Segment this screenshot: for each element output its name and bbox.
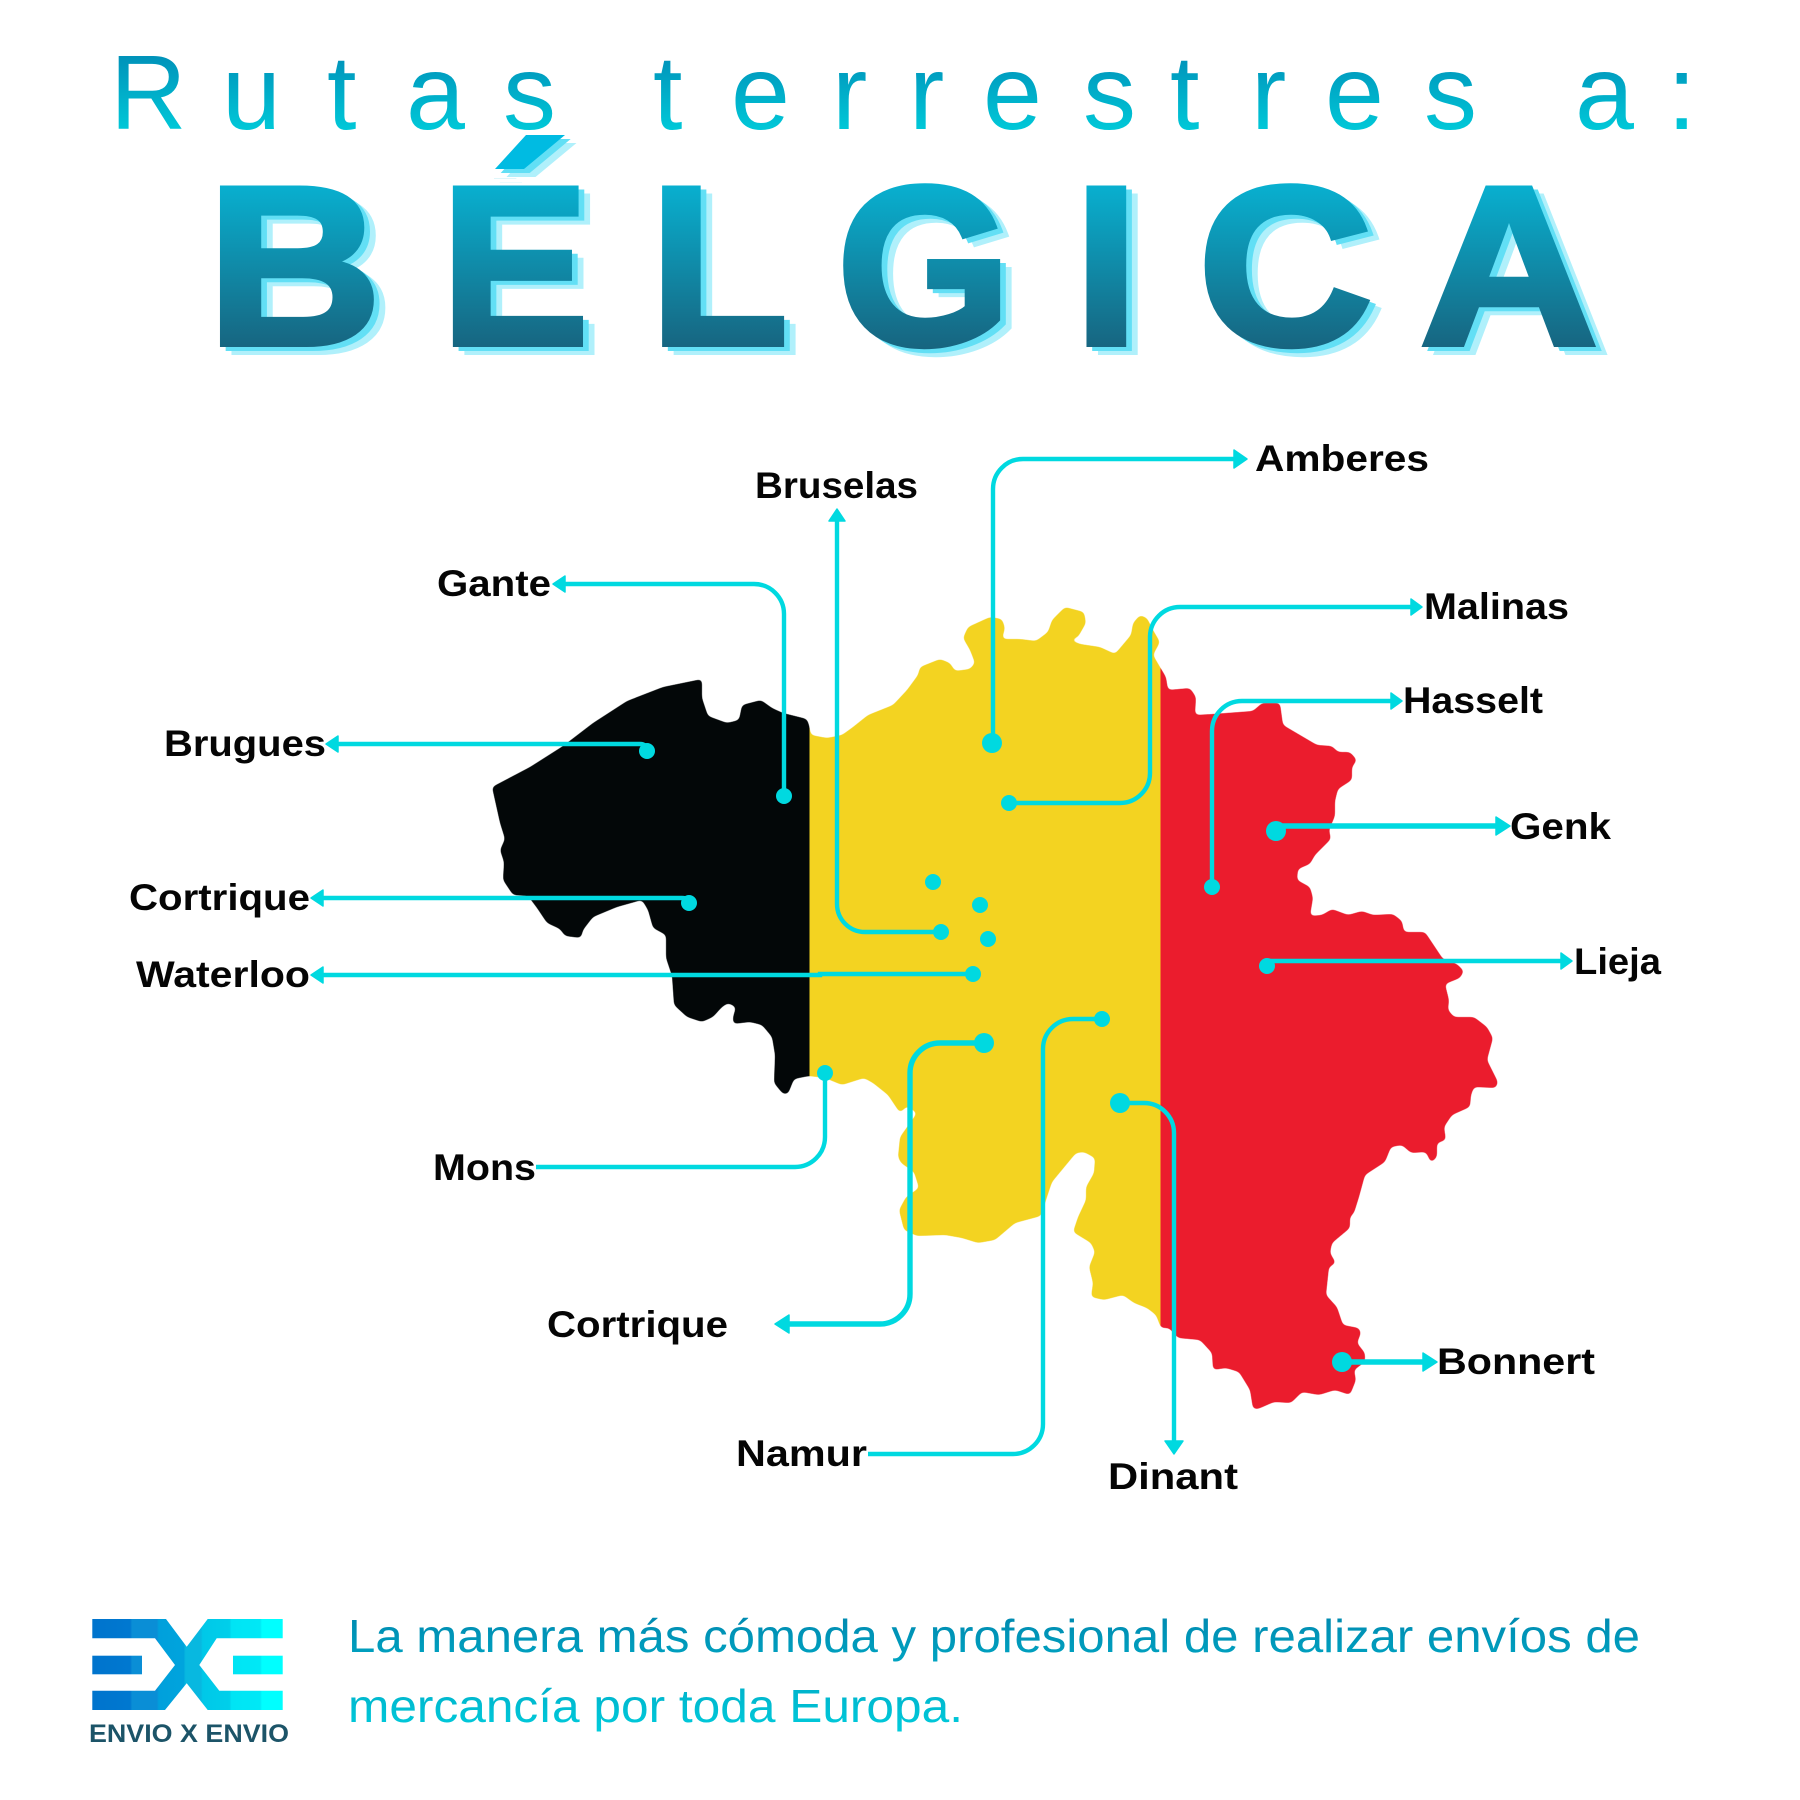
route: Cortrique west bbox=[129, 877, 697, 918]
route: Bonnert: Bonnert bbox=[1437, 1341, 1595, 1382]
title shadow near layer: B bbox=[213, 143, 387, 396]
route: Hasselt: Hasselt bbox=[1403, 680, 1543, 721]
title shadow near layer: L bbox=[656, 143, 794, 396]
icon: EXE mark bbox=[92, 1619, 283, 1710]
route: Gante bbox=[437, 563, 792, 804]
title shadow near layer bbox=[226, 139, 1602, 354]
tagline text bbox=[348, 1610, 1640, 1732]
route: Cortrique south bbox=[547, 1033, 994, 1345]
route: Gante: Gante bbox=[437, 563, 551, 604]
route: Bonnert bbox=[1332, 1341, 1595, 1382]
title shadow far layer: A bbox=[1432, 148, 1609, 401]
icon: acute accent bbox=[495, 135, 565, 169]
title main letters: L bbox=[650, 139, 788, 392]
route: Bruselas bbox=[755, 465, 949, 940]
route: Genk bbox=[1266, 806, 1611, 847]
title shadow near layer: I bbox=[1080, 143, 1144, 396]
title shadow far layer: C bbox=[1210, 147, 1384, 400]
route: Cortrique south: Cortrique bbox=[547, 1304, 728, 1345]
route: Lieja bbox=[1259, 941, 1661, 982]
map of Belgium in flag colours bbox=[480, 590, 1510, 1420]
route: Waterloo bbox=[136, 954, 981, 995]
route: Mons bbox=[433, 1065, 833, 1188]
title main letters: G bbox=[837, 139, 1011, 392]
title: BÉLGICA bbox=[220, 135, 1608, 358]
title: Rutas terrestres a:: Rutas terrestres a: bbox=[110, 34, 1696, 152]
route: Malinas bbox=[1001, 586, 1569, 811]
title main letters: I bbox=[1074, 139, 1139, 392]
route: Dinant: Dinant bbox=[1108, 1456, 1238, 1497]
tagline text: mercancía por toda Europa. bbox=[348, 1680, 963, 1732]
title shadow near layer: É bbox=[447, 144, 594, 396]
route: Bruselas: Bruselas bbox=[755, 465, 918, 506]
title shadow far layer: G bbox=[848, 147, 1023, 400]
route: Waterloo: Waterloo bbox=[136, 954, 310, 995]
route: Namur bbox=[736, 1011, 1110, 1474]
tagline text: La manera más cómoda y profesional de realizar envíos de bbox=[348, 1610, 1640, 1662]
title main letters: É bbox=[441, 140, 589, 392]
title shadow near layer: G bbox=[843, 143, 1017, 396]
route: Hasselt bbox=[1204, 680, 1543, 895]
route: Brugues bbox=[164, 723, 655, 764]
title main letters: C bbox=[1198, 139, 1373, 392]
title shadow far layer: B bbox=[218, 147, 393, 400]
title main letters: A bbox=[1420, 140, 1598, 393]
title shadow near layer: A bbox=[1426, 144, 1604, 397]
route: Amberes bbox=[982, 438, 1429, 753]
route: Mons: Mons bbox=[433, 1147, 536, 1188]
unlabelled city dots bbox=[925, 874, 996, 947]
route: Genk: Genk bbox=[1510, 806, 1611, 847]
logo wordmark: ENVIO X ENVIO bbox=[89, 1720, 289, 1748]
title shadow far layer bbox=[232, 143, 1608, 358]
route: Malinas: Malinas bbox=[1424, 586, 1569, 627]
title main letters bbox=[220, 178, 1596, 350]
route: Namur: Namur bbox=[736, 1433, 867, 1474]
route: Brugues: Brugues bbox=[164, 723, 326, 764]
route: Dinant bbox=[1108, 1093, 1238, 1497]
title shadow far layer: É bbox=[452, 148, 600, 400]
title shadow far layer: I bbox=[1086, 147, 1150, 400]
title shadow near layer: C bbox=[1204, 143, 1378, 396]
route: Cortrique west: Cortrique bbox=[129, 877, 310, 918]
title shadow far layer: L bbox=[662, 147, 800, 400]
route: Lieja: Lieja bbox=[1574, 941, 1661, 982]
logo: Envio X Envio bbox=[89, 1619, 289, 1748]
title main letters: B bbox=[207, 139, 382, 392]
route: Amberes: Amberes bbox=[1255, 438, 1429, 479]
